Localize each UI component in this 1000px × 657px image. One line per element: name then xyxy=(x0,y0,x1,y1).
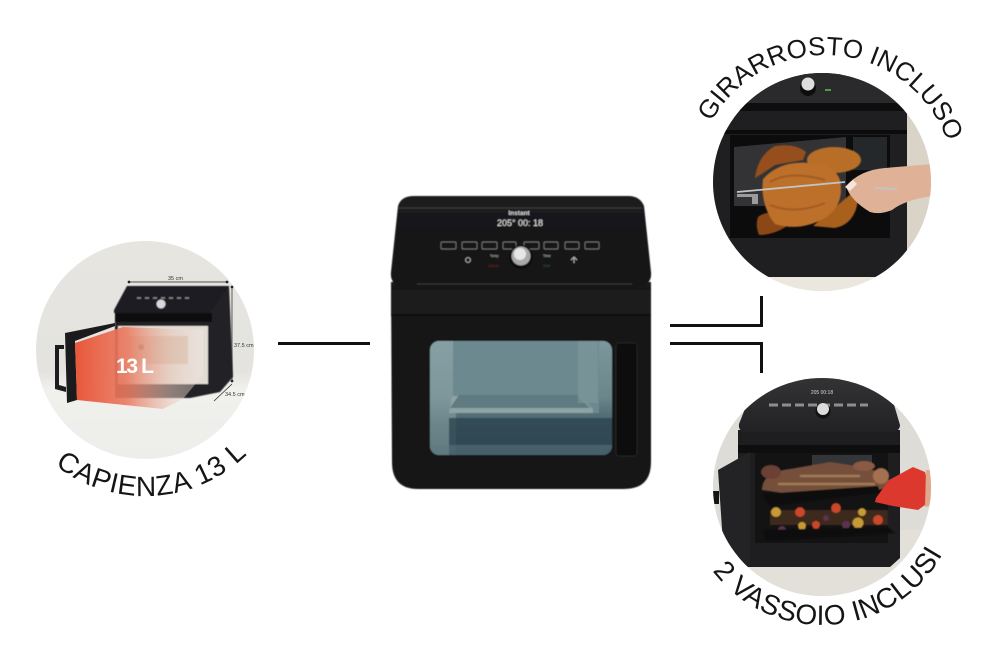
connector line left xyxy=(278,342,370,345)
panel labels: Cancel xyxy=(488,264,499,268)
upper tray with meat xyxy=(761,461,895,506)
heading: capacity: CAPIENZA 13 L xyxy=(59,447,247,496)
lower tray with vegetables xyxy=(763,503,895,541)
panel: two trays photo circle xyxy=(712,377,935,600)
open door xyxy=(718,452,750,567)
panel: capacity photo circle xyxy=(36,241,254,459)
panel: main air fryer product xyxy=(391,196,651,489)
photo background xyxy=(712,377,932,597)
panel labels: Temp xyxy=(490,254,499,258)
capacity figure: 13 L xyxy=(116,355,154,378)
oven cavity xyxy=(730,135,890,238)
panel labels xyxy=(488,254,551,268)
fryer body xyxy=(738,430,900,567)
indicator lights xyxy=(825,89,831,91)
rotisserie rod xyxy=(737,182,897,192)
dimension labels: 35 cm xyxy=(168,276,183,282)
display readout: 205 00:18 xyxy=(811,390,833,396)
oven cavity xyxy=(755,453,888,543)
open door and handle xyxy=(65,323,115,403)
connector line to rotisserie xyxy=(670,296,762,326)
roast chicken xyxy=(755,145,861,235)
control dial xyxy=(816,403,830,418)
control dial xyxy=(509,245,533,269)
fryer front xyxy=(705,70,907,277)
fryer side view xyxy=(114,286,233,398)
photo background xyxy=(712,72,932,292)
fryer body xyxy=(391,282,651,489)
dimension labels: 34.5 cm xyxy=(225,392,245,398)
control panel lid xyxy=(391,196,651,290)
photo background xyxy=(36,241,254,459)
panel buttons xyxy=(769,404,868,406)
panel labels: Start xyxy=(543,264,550,268)
glass window xyxy=(430,341,612,455)
heading: trays: 2 VASSOIO INCLUSI xyxy=(713,546,942,625)
body seam xyxy=(391,314,651,316)
function buttons xyxy=(441,242,599,249)
display readout: 205° 00: 18 xyxy=(497,218,543,229)
hand holding skewer xyxy=(846,164,932,213)
panel icons xyxy=(466,257,577,263)
red oven mitt xyxy=(875,467,932,510)
control panel lid xyxy=(739,378,900,432)
dimension lines xyxy=(128,281,233,401)
heading: rotisserie: GIRARROSTO INCLUSO xyxy=(700,36,962,138)
panel labels: Time xyxy=(543,254,551,258)
door handle xyxy=(616,343,637,456)
upper body band xyxy=(391,290,651,315)
connector line to trays xyxy=(670,344,762,373)
red capacity volume xyxy=(75,327,203,409)
dimension labels xyxy=(168,276,254,398)
control dial xyxy=(800,78,816,96)
lid highlight xyxy=(398,208,642,284)
panel: rotisserie photo circle xyxy=(705,70,932,294)
brand logo: Instant xyxy=(508,210,530,217)
dimension labels: 37.5 cm xyxy=(234,343,254,349)
oven interior xyxy=(430,341,619,458)
